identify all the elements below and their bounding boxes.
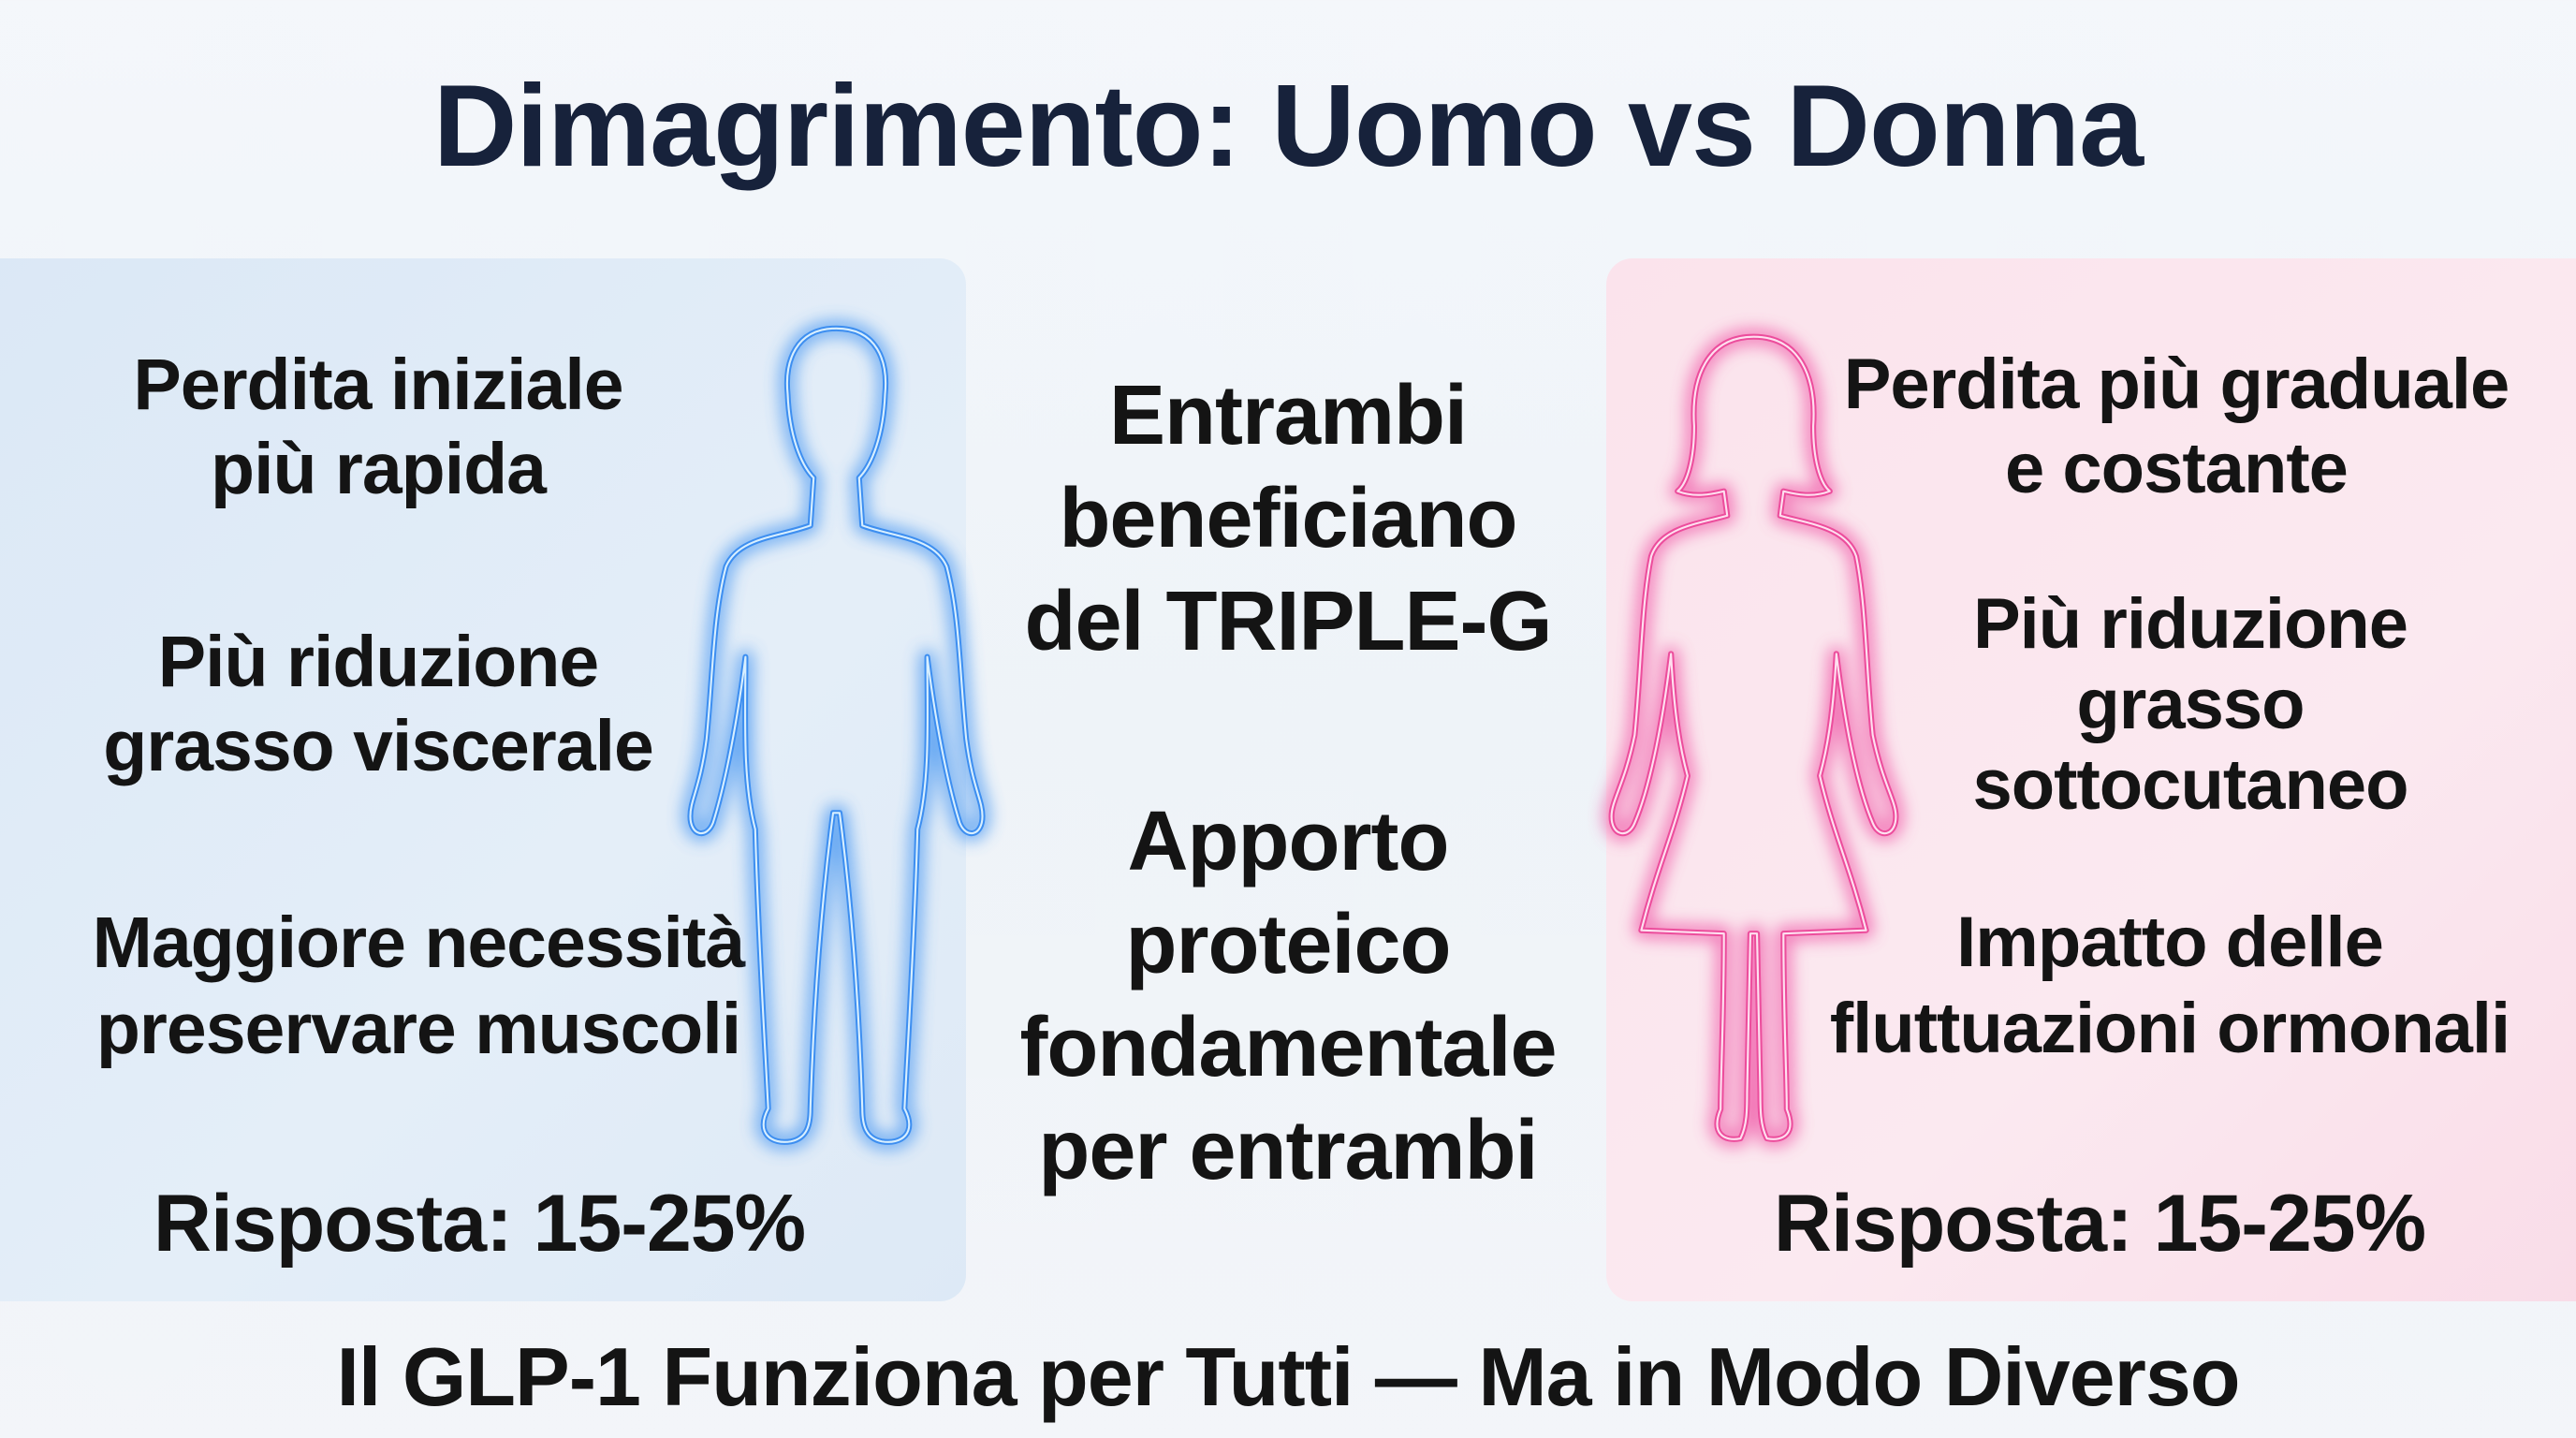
- text: donna ormonali: Impatto delle: [1956, 902, 2383, 982]
- text: centro triple-g: beneficiano: [1059, 472, 1517, 565]
- text: donna perdita graduale: [1844, 345, 2509, 508]
- text: uomo grasso viscerale: grasso viscerale: [103, 706, 653, 786]
- text: uomo muscoli: [93, 902, 745, 1069]
- text: uomo perdita iniziale: [133, 345, 623, 509]
- title: Dimagrimento: Uomo vs Donna: [433, 62, 2143, 191]
- text: centro proteico: per entrambi: [1038, 1104, 1538, 1197]
- text: donna sottocutaneo: [1972, 584, 2408, 825]
- text: uomo grasso viscerale: Più riduzione: [158, 622, 598, 702]
- text: centro proteico: Apporto: [1128, 795, 1448, 888]
- text: uomo muscoli: preservare muscoli: [96, 989, 740, 1069]
- text: centro proteico: [1019, 795, 1557, 1197]
- text: donna sottocutaneo: Più riduzione: [1973, 584, 2408, 664]
- text: donna perdita graduale: e costante: [2005, 429, 2348, 508]
- text: centro triple-g: [1024, 369, 1552, 668]
- panel: uomo background: [0, 258, 966, 1301]
- text: uomo muscoli: Maggiore necessità: [93, 902, 744, 983]
- panel: donna background: [1606, 258, 2576, 1301]
- text: donna ormonali: fluttuazioni ormonali: [1830, 989, 2510, 1068]
- bottom tagline: Il GLP-1 Funziona per Tutti — Ma in Modo Diverso: [336, 1330, 2240, 1423]
- text: uomo perdita iniziale: più rapida: [211, 429, 546, 509]
- text: uomo grasso viscerale: [103, 622, 653, 786]
- icon: male silhouette: [672, 310, 1002, 1161]
- text: centro proteico: proteico: [1125, 898, 1451, 991]
- text: donna ormonali: [1830, 902, 2510, 1068]
- icon: female silhouette: [1593, 318, 1913, 1157]
- text: donna perdita graduale: Perdita più graduale: [1844, 345, 2509, 424]
- text: donna risposta: Risposta: 15-25%: [1774, 1179, 2425, 1269]
- text: donna sottocutaneo: sottocutaneo: [1972, 745, 2408, 825]
- text: centro proteico: fondamentale: [1019, 1001, 1557, 1094]
- text: centro triple-g: Entrambi: [1109, 369, 1467, 462]
- text: uomo risposta: Risposta: 15-25%: [154, 1179, 805, 1269]
- text: donna sottocutaneo: grasso: [2076, 665, 2305, 744]
- text: uomo perdita iniziale: Perdita iniziale: [133, 345, 623, 425]
- text: centro triple-g: del TRIPLE-G: [1024, 575, 1552, 668]
